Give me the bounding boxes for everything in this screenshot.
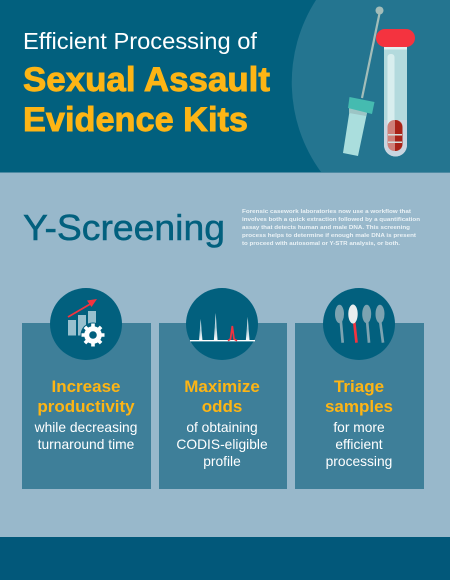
panel text [34, 420, 137, 452]
panel text [326, 420, 392, 469]
panel heading [37, 377, 135, 416]
panel text: profile [203, 454, 241, 469]
panel text: for more [333, 420, 385, 435]
panel heading: productivity [37, 397, 135, 416]
heading: sexual assault evidence kits [23, 61, 270, 139]
panel heading: Increase [52, 377, 120, 396]
panel heading: Maximize [184, 377, 260, 396]
panel text [176, 420, 268, 469]
panel: triage samples [295, 323, 424, 489]
panel: increase productivity [22, 323, 151, 489]
heading: efficient processing of: Efficient Processing of [23, 28, 257, 54]
panel heading: samples [325, 397, 393, 416]
heading: sexual assault evidence kits: Sexual Assault [23, 61, 270, 99]
panel text: while decreasing [34, 420, 137, 435]
panel heading: odds [202, 397, 242, 416]
text block: intro [242, 209, 421, 247]
panel text: CODIS-eligible [176, 437, 268, 452]
panel: maximize odds [159, 323, 287, 489]
text block: intro: involves both a quick extraction followed by a quantification [242, 217, 421, 223]
panel heading [325, 377, 393, 416]
panel text: turnaround time [38, 437, 135, 452]
panel text: of obtaining [186, 420, 258, 435]
icon: swab [343, 6, 384, 156]
heading: sexual assault evidence kits: Evidence Kits [23, 101, 248, 139]
text block: intro: to proceed with autosomal or Y-STR analysis, or both. [242, 241, 400, 247]
heading: Y-Screening: Y-Screening [23, 207, 225, 248]
icon: four swabs [323, 288, 395, 360]
text block: intro: Forensic casework laboratories now use a workflow that [242, 209, 411, 215]
panel text: efficient [335, 437, 383, 452]
panel heading [184, 377, 260, 416]
icon: test tube with blood [376, 29, 415, 156]
footer band [0, 537, 450, 580]
panel text: processing [326, 454, 392, 469]
icon: electropherogram peaks [186, 288, 258, 360]
text block: intro: assay that detects human and male DNA. This screening [242, 225, 411, 231]
header band [0, 0, 450, 173]
text block: intro: process helps to determine if enough male DNA is present [242, 233, 416, 239]
panel heading: Triage [334, 377, 384, 396]
icon: bars, arrow and gear [50, 288, 122, 360]
